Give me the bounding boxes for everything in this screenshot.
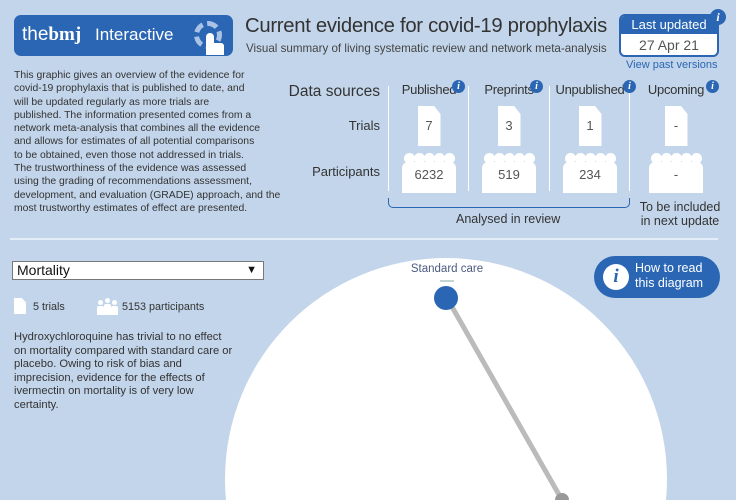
column dividers [388, 86, 389, 191]
divider [10, 238, 718, 240]
text: Trials [349, 118, 380, 133]
dropdown: outcome: ▼ [246, 264, 257, 276]
button: how to read this diagram [594, 256, 720, 298]
icon: info last updated: i [716, 10, 720, 24]
intro text: development, and evaluation (GRADE) approach, and the [14, 190, 280, 201]
summary text [14, 331, 232, 411]
text: i [711, 81, 714, 92]
icon: info last updated [710, 9, 726, 25]
button: how to read this diagram: How to read [635, 261, 702, 275]
intro text: published. The information presented comes from a [14, 110, 251, 121]
column: unpublished: 1 [586, 118, 594, 133]
column: preprints: 519 [498, 167, 520, 182]
intro text: and allows for estimates of all potential comparisons [14, 136, 254, 147]
summary text: on mortality compared with standard care or [14, 345, 232, 357]
logo: thebmj Interactive [14, 15, 233, 56]
intro text: most trustworthy estimates of effect are presented. [14, 203, 247, 214]
bracket: analysed in review [388, 198, 630, 208]
intro text: using the grading of recommendations assessment, [14, 176, 252, 187]
logo: thebmj Interactive: Interactive [95, 25, 173, 44]
subtitle: Visual summary of living systematic review and network meta-analysis [246, 42, 607, 55]
intro text [14, 70, 280, 214]
data sources labels: Data sources [289, 83, 380, 100]
column: published [402, 82, 456, 193]
intro text: network meta-analysis that combines all the evidence [14, 123, 260, 134]
column: published: 7 [425, 118, 433, 133]
button: how to read this diagram: i [613, 266, 619, 287]
text: i [457, 81, 460, 92]
text: i [628, 81, 631, 92]
column: upcoming: Upcoming [648, 82, 704, 97]
title: Current evidence for covid-19 prophylaxis [245, 15, 607, 37]
icon: touch hand [194, 21, 222, 49]
summary text: ivermectin on mortality is of very low [14, 385, 194, 397]
button: how to read this diagram: this diagram [635, 276, 703, 290]
logo: thebmj Interactive: thebmj [22, 24, 81, 45]
text: Participants [312, 164, 380, 179]
dropdown: outcome: Mortality [17, 262, 70, 278]
intro text: This graphic gives an overview of the evidence for [14, 70, 244, 81]
column: unpublished: Unpublished [556, 82, 624, 97]
column: unpublished [556, 82, 624, 193]
intro text: covid-19 prophylaxis that is published to date, and [14, 83, 244, 94]
last updated box: 27 Apr 21 [639, 37, 699, 53]
intro text: The trustworthiness of the evidence was assessed [14, 163, 246, 174]
column: preprints [482, 82, 536, 193]
summary text: certainty. [14, 399, 59, 411]
column: upcoming: - [674, 167, 678, 182]
text: Analysed in review [456, 212, 560, 226]
column: published: 6232 [415, 167, 443, 182]
summary text: imprecision, evidence for the effects of [14, 372, 205, 384]
intro text: to be obtained, even those not addressed in trials. [14, 150, 244, 161]
stats: trials and participants: 5153 participants [122, 301, 204, 313]
summary text: Hydroxychloroquine has trivial to no effect [14, 331, 222, 343]
last updated box: Last updated [631, 17, 707, 32]
last updated box [619, 14, 719, 57]
note: to be included: To be included in next update [640, 200, 720, 228]
column: published: Published [402, 82, 456, 97]
summary text: placebo. Owing to risk of bias and [14, 358, 182, 370]
chart: network diagram: Standard care [411, 263, 483, 275]
column: preprints: Preprints [484, 82, 534, 97]
stats: trials and participants [14, 298, 204, 315]
column: preprints: 3 [505, 118, 513, 133]
column: unpublished: 234 [579, 167, 601, 182]
text: i [535, 81, 538, 92]
intro text: will be updated regularly as more trials are [14, 97, 209, 108]
column: upcoming: - [674, 118, 678, 133]
dropdown: outcome [12, 261, 264, 280]
link: view past versions: View past versions [626, 59, 718, 71]
column: upcoming [648, 82, 704, 193]
stats: trials and participants: 5 trials [33, 301, 65, 313]
